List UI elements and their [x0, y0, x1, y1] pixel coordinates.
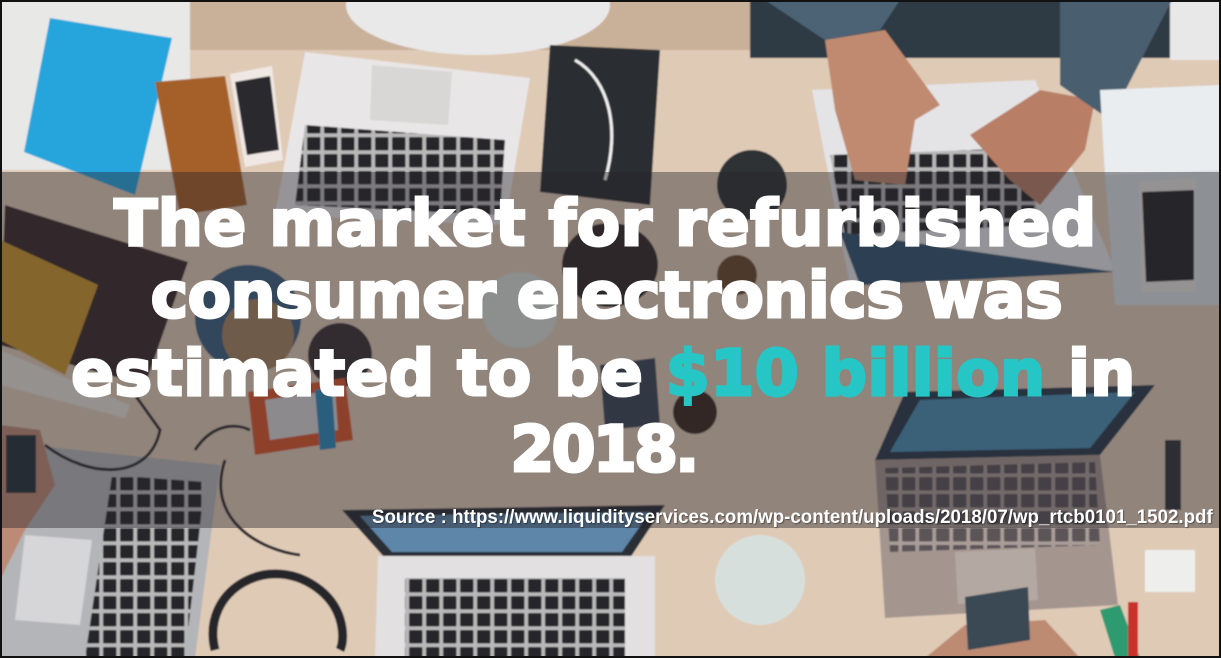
left wallet [0, 205, 188, 385]
bottom phone + hands [925, 620, 1080, 658]
source line: Source : https://www.liquidityservices.com/wp-content/uploads/2018/07/wp_rtcb0101_1502.pdf [372, 507, 1213, 528]
phone [230, 66, 283, 167]
cables [45, 395, 300, 555]
headline: 2018. [510, 413, 697, 486]
headline [71, 187, 1136, 486]
laptop top [275, 52, 530, 225]
books left [0, 350, 130, 418]
right papers + phone [1100, 85, 1221, 175]
black notebook [540, 45, 660, 205]
phone mid [600, 358, 660, 430]
bottom-right laptop [875, 385, 1155, 460]
headphones [213, 574, 343, 650]
white charger + pens [1145, 550, 1195, 592]
headline: The market for refurbished [114, 187, 1097, 260]
glass jar [715, 535, 805, 625]
headline: consumer electronics was [151, 259, 1062, 332]
coffee [717, 150, 787, 220]
headline: estimated to be $10 billion in [71, 337, 1136, 410]
bowl [195, 265, 301, 371]
dark translucent band behind headline [0, 172, 1221, 528]
notebook blue [24, 18, 172, 195]
brown pouch [155, 76, 247, 215]
bottom-left laptop [0, 445, 220, 658]
right laptop & hands [812, 80, 1115, 285]
left hand [0, 425, 55, 580]
bottom-mid laptop [342, 505, 665, 558]
orange drive [248, 378, 353, 455]
